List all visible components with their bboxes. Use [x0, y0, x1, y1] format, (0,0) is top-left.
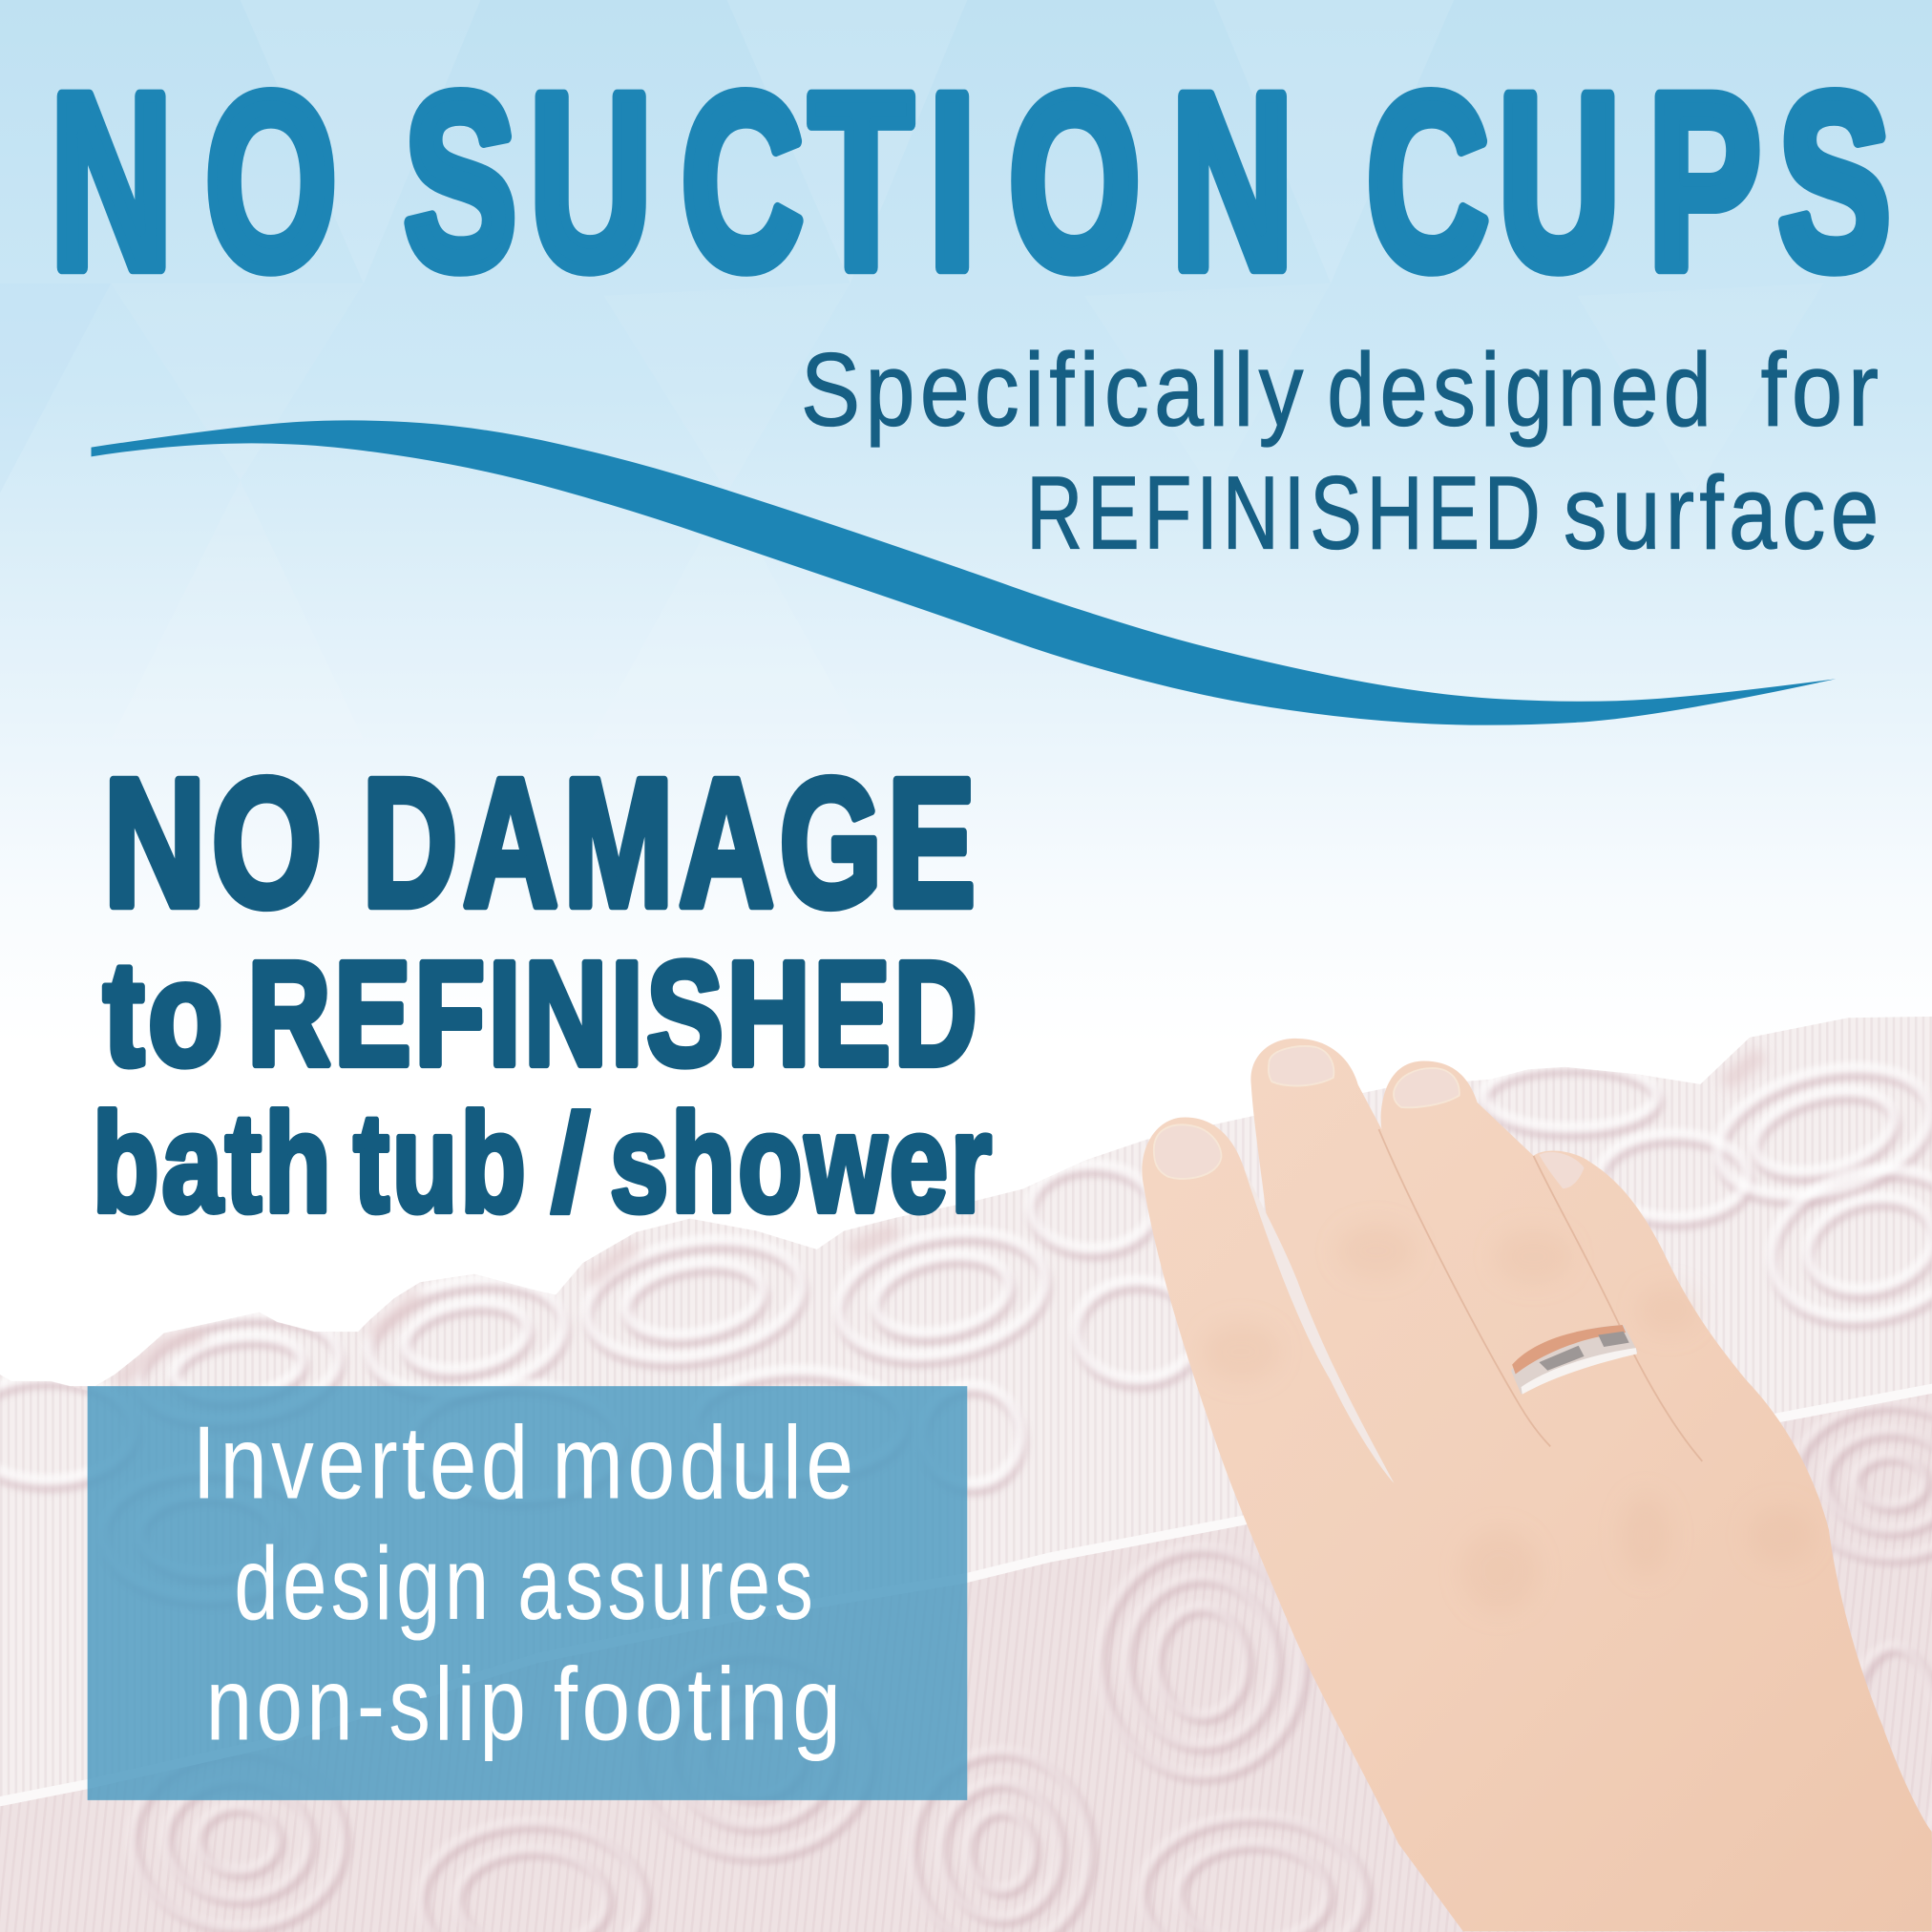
title: NO SUCTION CUPS — [51, 43, 1891, 321]
heading: no damage — [93, 742, 995, 1242]
heading: no damage: REFINISHED — [247, 931, 980, 1096]
hand with ring — [1142, 1039, 1932, 1931]
finger separations — [1378, 1129, 1702, 1461]
subtitle: for — [1761, 331, 1884, 447]
bath mat: raised front strip — [0, 1010, 1932, 1823]
heading: no damage: DAMAGE — [363, 742, 980, 945]
heading: no damage: tub — [353, 1085, 529, 1242]
wave swoosh — [92, 420, 1836, 725]
subtitle — [801, 331, 1884, 570]
panel copy: footing — [554, 1647, 846, 1762]
heading: no damage: shower — [610, 1085, 995, 1242]
raised rings on strip — [0, 1061, 1932, 1499]
strip front edge — [0, 1384, 1932, 1806]
concentric rings on lower mat — [132, 1403, 1932, 1932]
heading: no damage: NO — [103, 742, 327, 945]
panel copy — [192, 1405, 857, 1762]
soft skin shading — [1202, 1224, 1815, 1612]
subtitle: designed — [1327, 331, 1716, 447]
text panel: inverted module — [88, 1386, 967, 1800]
panel copy: Inverted — [192, 1405, 533, 1521]
subtitle: Specifically — [801, 331, 1309, 447]
panel copy: assures — [517, 1525, 817, 1641]
hand silhouette — [1142, 1039, 1932, 1931]
panel copy: non-slip — [206, 1647, 530, 1762]
panel copy: design — [234, 1525, 493, 1641]
panel copy: module — [552, 1405, 857, 1521]
finger gap — [1244, 1167, 1394, 1483]
ring — [1511, 1325, 1638, 1395]
heading: no damage: bath — [93, 1085, 334, 1242]
bath mat: lower layer — [0, 1386, 1932, 1932]
pink shading on left of domes — [117, 1054, 1762, 1382]
heading: no damage: to — [103, 931, 227, 1096]
fingernails — [1154, 1046, 1585, 1188]
background facets — [0, 0, 1823, 739]
subtitle: REFINISHED — [1026, 454, 1545, 570]
heading: no damage: / — [550, 1085, 592, 1242]
